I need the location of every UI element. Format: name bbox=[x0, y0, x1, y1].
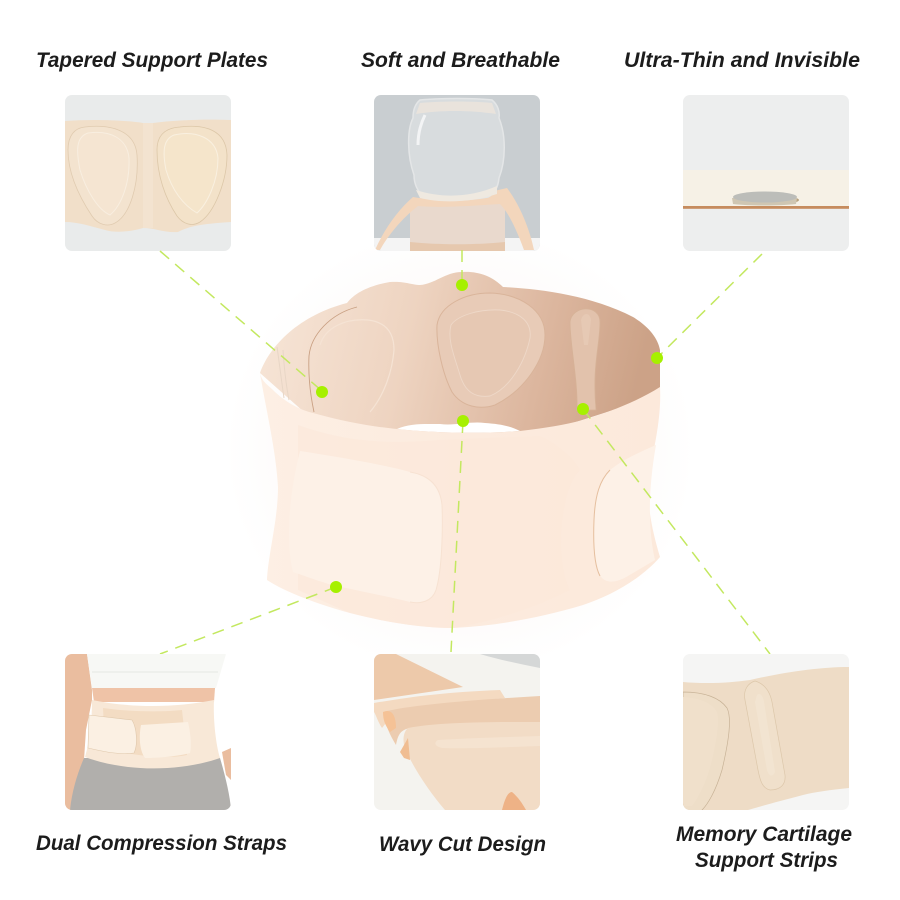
plate edge bbox=[683, 692, 729, 812]
dashed line: wavy cut bbox=[451, 421, 463, 652]
panel: memory cartilage strips photo bbox=[683, 654, 849, 812]
title: Soft and Breathable: Soft and Breathable bbox=[361, 49, 560, 72]
icon: glass jar bbox=[409, 98, 504, 200]
dashed line: memory strips bbox=[583, 409, 770, 654]
title: Ultra-Thin and Invisible: Ultra-Thin and Invisible bbox=[624, 49, 860, 72]
left strap bbox=[289, 451, 442, 603]
callout dot: ultra-thin bbox=[651, 352, 663, 364]
dashed line: tapered plates bbox=[160, 251, 322, 391]
icon: coin bbox=[732, 192, 799, 206]
belt on waist bbox=[85, 700, 220, 768]
title: Memory Cartilage Support Strips: Support Strips bbox=[695, 849, 838, 872]
left plate bbox=[320, 320, 394, 412]
title: Tapered Support Plates: Tapered Support Plates bbox=[36, 49, 268, 72]
title: Wavy Cut Design: Wavy Cut Design bbox=[379, 833, 546, 856]
right strap bbox=[594, 445, 656, 582]
dashed line: dual compression bbox=[160, 587, 336, 654]
belt inner surface bbox=[260, 272, 660, 440]
callout dot: memory strips bbox=[577, 403, 589, 415]
title: Memory Cartilage Support Strips bbox=[676, 823, 852, 872]
panel: ultra-thin coin photo bbox=[683, 95, 849, 251]
title: Dual Compression Straps: Dual Compression Straps bbox=[36, 832, 287, 855]
callout dot: tapered plates bbox=[316, 386, 328, 398]
callout dot: wavy cut bbox=[457, 415, 469, 427]
panel: soft and breathable jar photo bbox=[374, 95, 540, 251]
dashed line: soft and breathable bbox=[461, 250, 463, 285]
center plate bbox=[437, 293, 545, 407]
leggings bbox=[70, 758, 231, 810]
panel: wavy cut design photo bbox=[374, 654, 540, 810]
panel: tapered support plates photo bbox=[65, 95, 231, 251]
product: waist belt bbox=[260, 272, 660, 628]
hand bbox=[222, 748, 231, 780]
callout dot: soft and breathable bbox=[456, 279, 468, 291]
title: Memory Cartilage Support Strips: Memory Cartilage bbox=[676, 823, 852, 846]
callout dot: dual compression bbox=[330, 581, 342, 593]
icon: peach cloth strap bbox=[375, 188, 534, 250]
memory strip bbox=[745, 681, 785, 790]
strip bbox=[570, 309, 600, 410]
belt front bbox=[260, 373, 660, 628]
panel: model wearing belt photo bbox=[65, 654, 231, 810]
white gap bbox=[397, 423, 520, 433]
background glow bbox=[225, 225, 695, 675]
inner shading of front bbox=[298, 425, 580, 628]
dashed line: ultra-thin bbox=[657, 254, 762, 358]
left inner seam bbox=[277, 347, 289, 400]
icon: lower jar bbox=[410, 204, 505, 244]
